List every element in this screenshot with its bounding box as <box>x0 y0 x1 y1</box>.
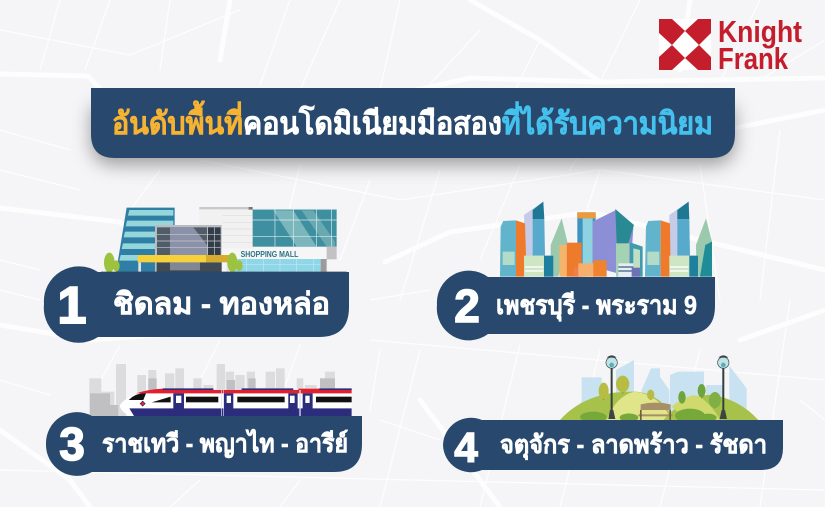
logo wordmark: Knight <box>718 14 802 49</box>
illustration: shopping mall <box>101 207 347 273</box>
trees <box>599 376 721 408</box>
logo wordmark: Frank <box>718 41 789 76</box>
rank number 1: 1 <box>58 277 86 335</box>
logo mark <box>659 19 711 70</box>
illustration: park <box>560 355 758 423</box>
area name 4: จตุจักร - ลาดพร้าว - รัชดา <box>500 431 767 461</box>
rank number 4: 4 <box>454 424 478 471</box>
panel: rank 2 <box>437 271 715 340</box>
panel: rank 3 <box>46 412 362 476</box>
title text: อันดับพื้นที่คอนโดมิเนียมมือสองที่ได้รับความนิยม <box>112 100 713 141</box>
illustration: city skyscrapers <box>500 202 712 277</box>
logo wordmark <box>718 14 802 76</box>
label: shopping mall sign: SHOPPING MALL <box>241 250 298 259</box>
rank number 3: 3 <box>59 418 85 470</box>
panel: rank 4 <box>443 418 783 472</box>
area name 1: ชิดลม - ทองหล่อ <box>113 288 330 321</box>
panel: rank 1 <box>44 266 349 343</box>
title banner <box>91 88 735 165</box>
logo: Knight Frank <box>659 14 802 76</box>
illustration: sky train <box>89 364 352 416</box>
area name 3: ราชเทวี - พญาไท - อารีย์ <box>102 428 348 458</box>
rank number 2: 2 <box>454 280 480 332</box>
bench <box>638 403 673 420</box>
area name 2: เพชรบุรี - พระราม 9 <box>496 290 697 322</box>
lamp posts <box>606 355 729 419</box>
